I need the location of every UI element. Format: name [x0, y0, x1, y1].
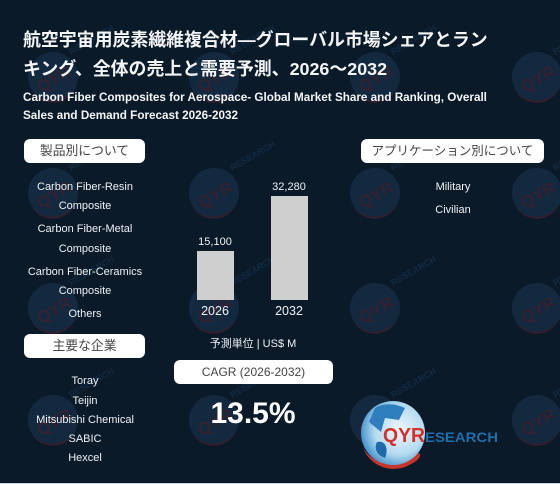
- subtitle: [23, 91, 487, 122]
- logo: QYResearch: [361, 401, 498, 469]
- heading: key companies: [24, 334, 145, 358]
- bottom edge: [0, 483, 560, 484]
- heading: by application: アプリケーション別について: [372, 144, 533, 158]
- bar label 2026: 2026: [201, 304, 229, 318]
- title: キング、全体の売上と需要予測、2026～2032: [23, 59, 387, 79]
- bar 2032: [271, 196, 308, 300]
- title: 航空宇宙用炭素繊維複合材—グローバル市場シェアとラン: [23, 30, 488, 50]
- application list: Military: [436, 181, 470, 193]
- title: [23, 30, 488, 79]
- subtitle: Sales and Demand Forecast 2026-2032: [23, 108, 238, 122]
- product list: Carbon Fiber-Metal: [38, 223, 132, 235]
- CAGR label: [174, 360, 333, 384]
- product list: [28, 181, 142, 320]
- company list: Toray: [72, 375, 98, 387]
- product list: Others: [68, 308, 102, 320]
- unit label: 予測単位 | US$ M: [210, 338, 296, 350]
- company list: SABIC: [68, 433, 102, 445]
- company list: Hexcel: [68, 452, 102, 464]
- product list: Composite: [59, 243, 111, 255]
- application list: Civilian: [435, 204, 471, 216]
- bar label 2032: 2032: [275, 304, 303, 318]
- heading: by product: [24, 139, 145, 163]
- bar chart: [197, 181, 308, 318]
- product list: Carbon Fiber-Resin: [37, 181, 133, 193]
- logo: QYResearch: QYR: [383, 425, 426, 447]
- logo: QYResearch: ESEARCH: [425, 429, 498, 445]
- subtitle: Carbon Fiber Composites for Aerospace- Global Market Share and Ranking, Overall: [23, 91, 487, 104]
- bar value 2032: 32,280: [272, 181, 306, 193]
- CAGR value: 13.5%: [210, 397, 296, 430]
- heading: by product: 製品別について: [40, 143, 129, 158]
- heading: by application: [361, 139, 544, 163]
- bar 2026: [197, 251, 234, 300]
- product list: Composite: [59, 200, 111, 212]
- heading: key companies: 主要な企業: [52, 338, 116, 353]
- company list: Teijin: [72, 395, 98, 407]
- CAGR label: CAGR (2026-2032): [202, 365, 305, 379]
- product list: Composite: [59, 285, 111, 297]
- company list: Mitsubishi Chemical: [36, 414, 134, 426]
- bar value 2026: 15,100: [198, 236, 232, 248]
- company list: [36, 375, 134, 464]
- application list: [435, 181, 471, 216]
- product list: Carbon Fiber-Ceramics: [28, 266, 142, 278]
